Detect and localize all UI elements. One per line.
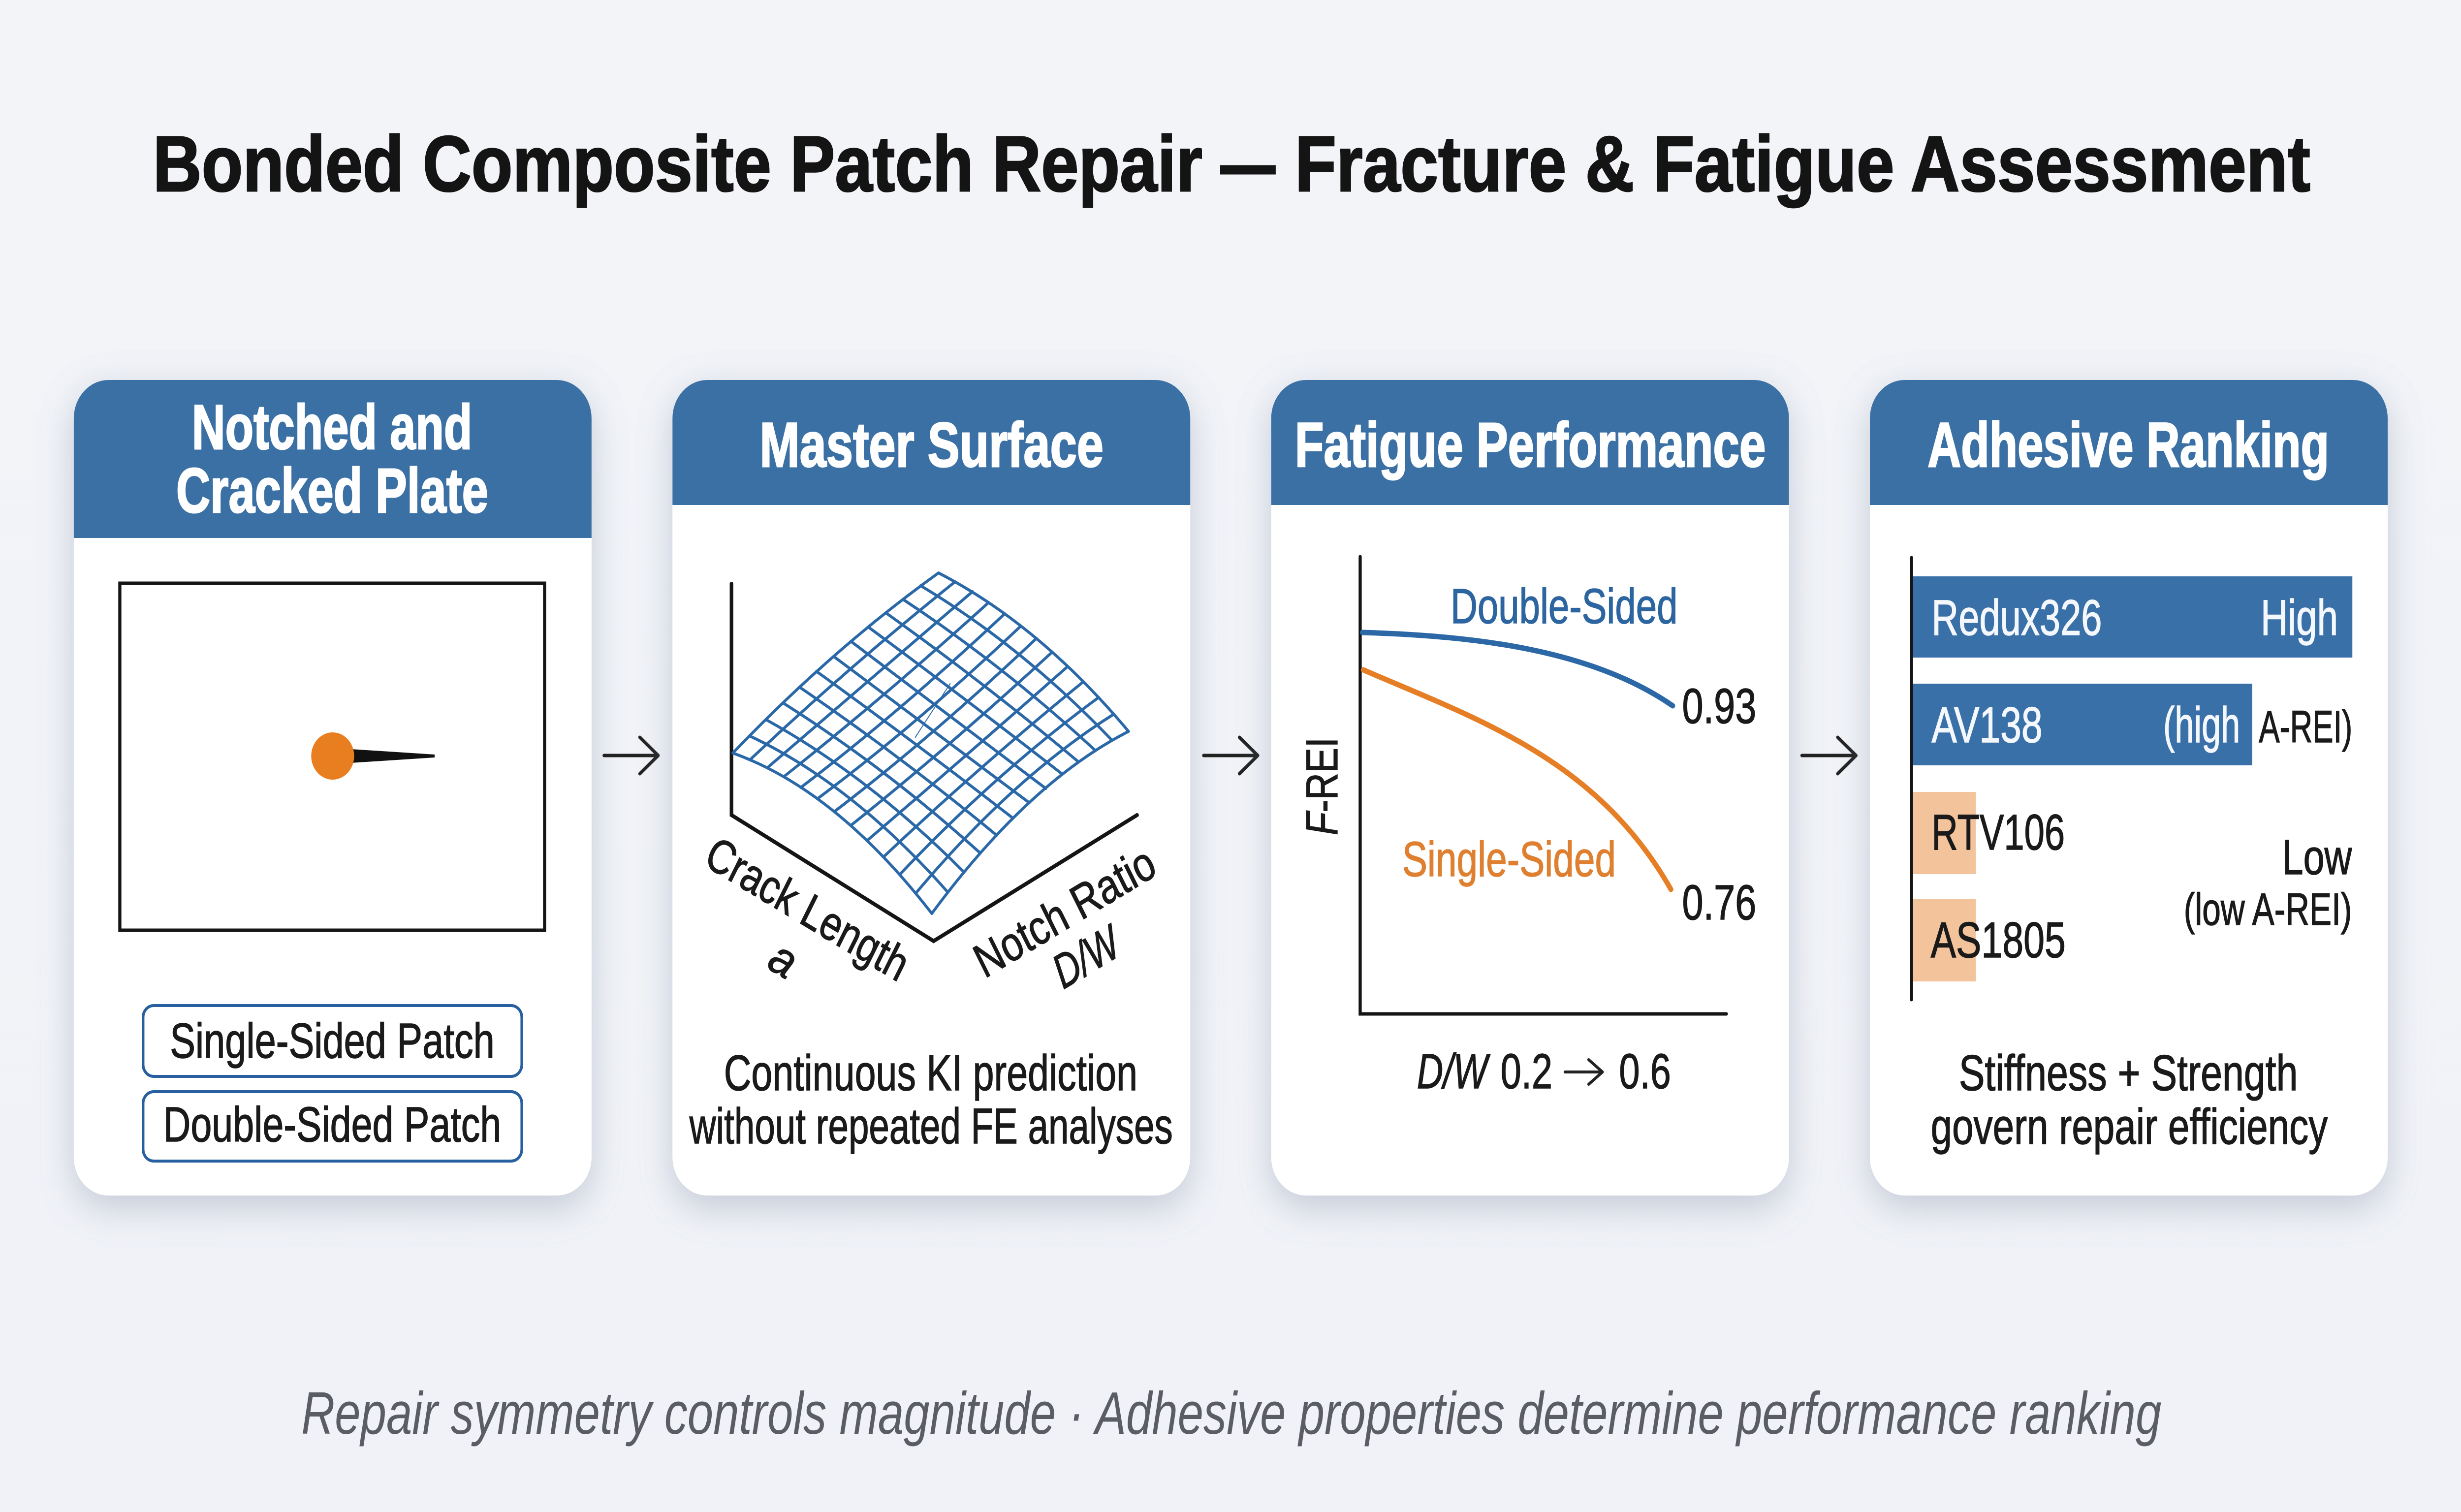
caption xyxy=(689,1045,1173,1154)
panel card xyxy=(672,380,1190,1196)
x-axis label: 0.6 xyxy=(1619,1044,1671,1099)
arrow xyxy=(1203,737,1258,774)
bar: AV138 xyxy=(1913,684,2352,765)
bar: AS1805: AS1805 xyxy=(1931,912,2066,968)
bar: AV138: A-REI) xyxy=(2259,701,2352,752)
panel: notched and cracked plate xyxy=(74,380,592,1196)
caption: govern repair efficiency xyxy=(1931,1099,2328,1155)
caption: without repeated FE analyses xyxy=(689,1098,1173,1154)
panel header xyxy=(672,380,1190,505)
plate diagram with notch and crack xyxy=(120,583,544,930)
panel header: Fatigue Performance xyxy=(1295,410,1766,480)
caption: Stiffness + Strength xyxy=(1959,1045,2298,1101)
panel header: Notched and xyxy=(192,392,472,462)
panel: master surface xyxy=(672,380,1190,1196)
mesh surface xyxy=(733,573,1129,914)
bar: AV138: (high xyxy=(2163,697,2240,753)
low group label: (low A-REI) xyxy=(2184,883,2352,935)
bar: RTV106 xyxy=(1913,792,2065,874)
axis label: notch ratio: D/W xyxy=(1044,914,1130,999)
line chart: F-REI xyxy=(1297,737,1347,835)
curve: single-sided xyxy=(1363,670,1671,889)
double-sided patch label xyxy=(143,1092,522,1161)
single-sided patch label: Single-Sided Patch xyxy=(170,1014,495,1069)
caption xyxy=(1931,1045,2328,1155)
x-axis label: 0.2 xyxy=(1501,1044,1552,1099)
title: Bonded Composite Patch Repair xyxy=(153,121,1202,208)
bar: AV138: AV138 xyxy=(1931,697,2043,753)
line chart: 0.93 xyxy=(1682,679,1756,734)
single-sided patch label xyxy=(143,1006,522,1076)
bar: AS1805 xyxy=(1913,899,2066,981)
bar: RTV106: RTV106 xyxy=(1931,804,2065,860)
panel card xyxy=(1870,380,2388,1196)
title xyxy=(153,121,2310,208)
arrow xyxy=(1802,737,1856,774)
x-axis label: D/W xyxy=(1417,1044,1490,1099)
line chart: Double-Sided xyxy=(1451,579,1677,634)
x-axis label xyxy=(1417,1044,1671,1099)
arrow xyxy=(604,737,658,774)
line chart xyxy=(1297,557,1756,1014)
bar chart xyxy=(1912,558,2352,1000)
axis label: crack length: Crack Length xyxy=(698,826,917,991)
title: — xyxy=(1221,121,1275,208)
panel: adhesive ranking xyxy=(1870,380,2388,1196)
axis label: crack length: a xyxy=(761,929,806,989)
panel header xyxy=(1271,380,1789,505)
panel header xyxy=(1870,380,2388,505)
low group label: Low xyxy=(2282,830,2352,885)
line chart: 0.76 xyxy=(1682,876,1756,930)
bar: Redux326 xyxy=(1913,576,2352,658)
panel: fatigue performance xyxy=(1271,380,1789,1196)
caption: Continuous KI prediction xyxy=(724,1045,1137,1101)
bar: Redux326: High xyxy=(2261,590,2338,646)
double-sided patch label: Double-Sided Patch xyxy=(163,1098,501,1152)
curve: double-sided xyxy=(1362,632,1672,706)
axis xyxy=(1910,558,1913,1000)
panel header: Master Surface xyxy=(759,410,1104,480)
3D axes xyxy=(731,584,1137,941)
title: Fracture & Fatigue Assessment xyxy=(1295,121,2310,208)
panel card xyxy=(1271,380,1789,1196)
panel card xyxy=(74,380,592,1196)
footer takeaway: Repair symmetry controls magnitude · Adhesive properties determine performance ranking xyxy=(301,1379,2161,1447)
bar: Redux326: Redux326 xyxy=(1931,590,2102,646)
axis label: notch ratio: Notch Ratio xyxy=(965,835,1164,988)
line chart: Single-Sided xyxy=(1402,832,1616,887)
panel header: Adhesive Ranking xyxy=(1927,410,2329,480)
panel header: Cracked Plate xyxy=(176,455,488,526)
low group label xyxy=(2184,830,2352,935)
panel header xyxy=(74,380,592,538)
